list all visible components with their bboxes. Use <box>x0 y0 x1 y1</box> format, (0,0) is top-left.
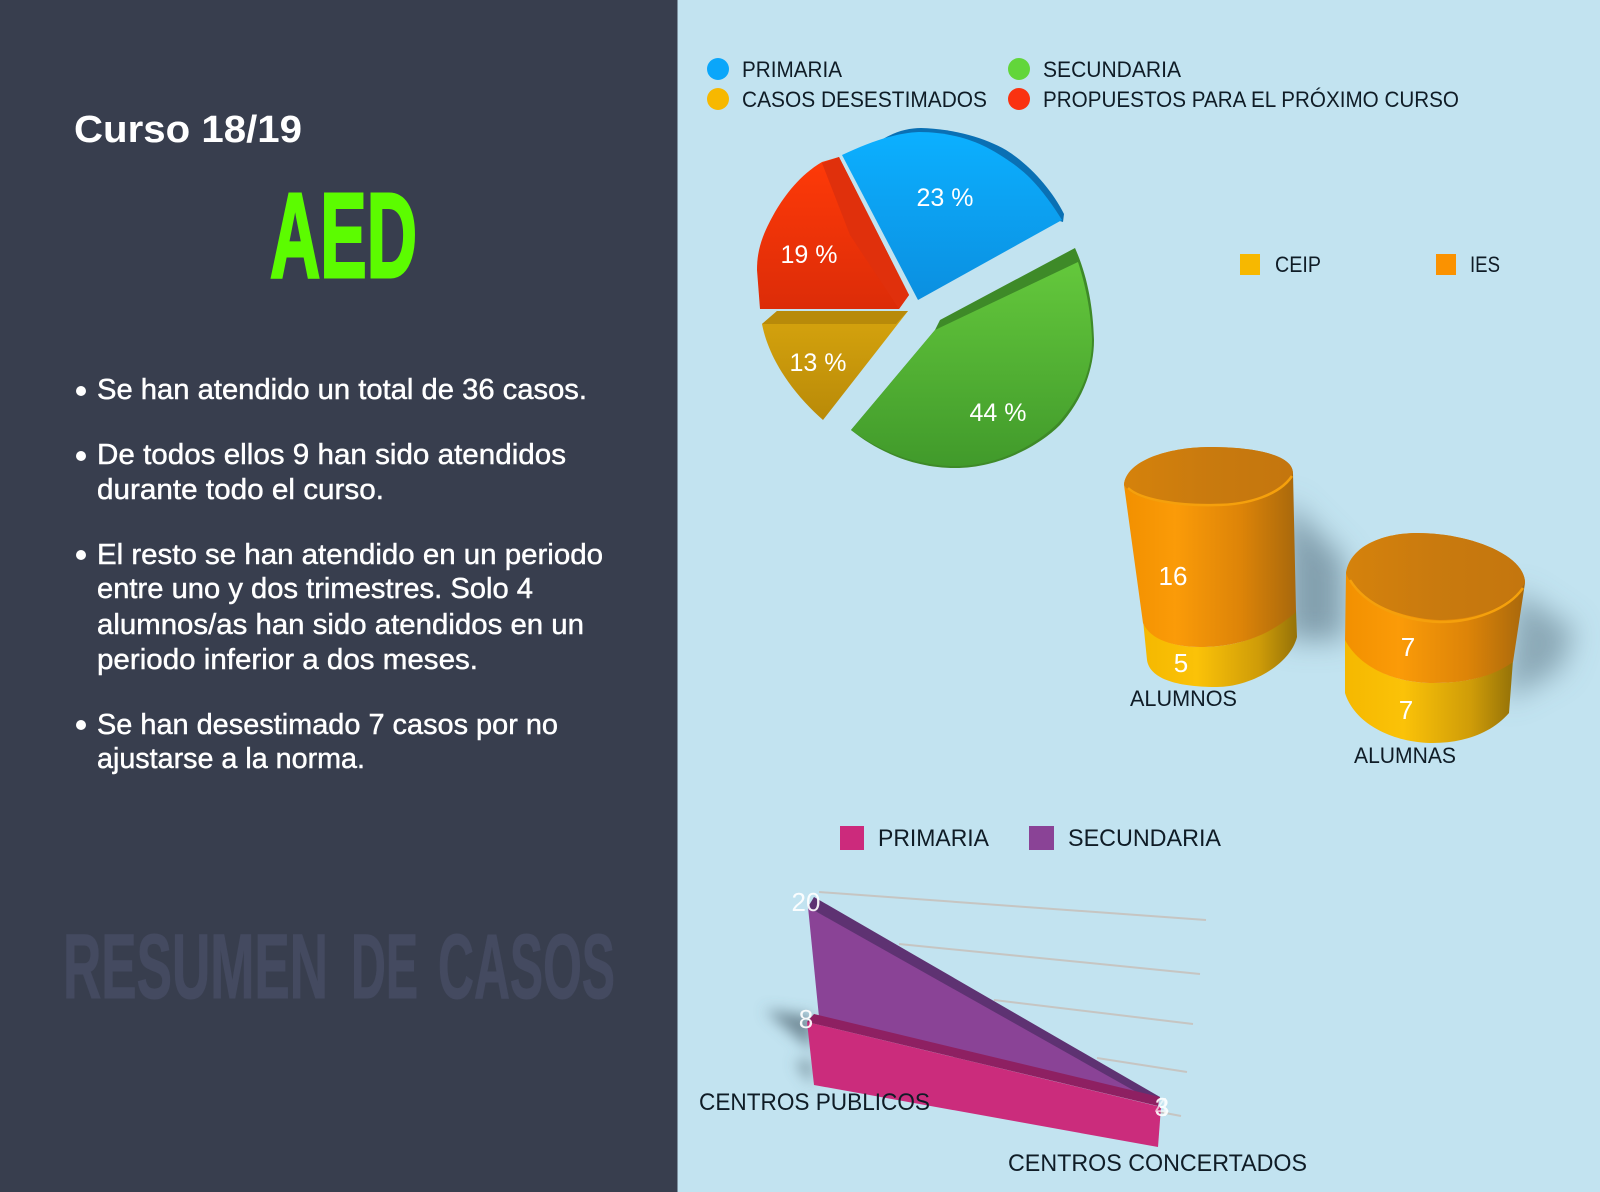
area chart legend: SECUNDARIA <box>1068 825 1221 852</box>
watermark title: DE <box>351 916 418 1018</box>
label: alumnas: ALUMNAS <box>1354 743 1456 768</box>
title: AED: AED <box>270 167 417 303</box>
cylinder chart legend <box>1240 252 1500 277</box>
axis label: centros publicos: CENTROS PUBLICOS <box>699 1089 930 1116</box>
bullet list: periodo inferior a dos meses. <box>97 644 478 676</box>
area chart legend: PRIMARIA <box>878 825 989 852</box>
bar: alumnas <box>1345 533 1525 743</box>
right panel background <box>677 0 1600 1192</box>
slice: primaria 23% <box>842 128 1064 300</box>
label: alumnos: ALUMNOS <box>1130 686 1237 711</box>
watermark title: RESUMEN <box>63 916 328 1018</box>
left panel <box>0 0 678 1192</box>
axis label: centros concertados: CENTROS CONCERTADOS <box>1008 1150 1307 1177</box>
bar: alumnas: 7 <box>1399 695 1413 725</box>
pie chart legend: SECUNDARIA <box>1043 57 1181 82</box>
cylinder chart legend: CEIP <box>1275 252 1321 277</box>
bullet list: Se han atendido un total de 36 casos. <box>97 374 587 406</box>
slice: propuestos 19% <box>757 157 909 309</box>
watermark title: CASOS <box>438 916 615 1018</box>
bar: alumnos: 16 <box>1159 561 1187 591</box>
cylinder chart legend: IES <box>1470 252 1500 277</box>
data labels: 4 <box>1155 1092 1169 1122</box>
bullet list: El resto se han atendido en un periodo <box>97 539 603 571</box>
data labels <box>792 887 1169 1122</box>
area: secundaria <box>808 897 1160 1103</box>
pie chart legend: PROPUESTOS PARA EL PRÓXIMO CURSO <box>1043 87 1459 112</box>
pie chart <box>757 128 1094 468</box>
bullet list: ajustarse a la norma. <box>97 743 365 775</box>
slice: desestimados 13% <box>762 311 908 420</box>
shadow <box>765 1010 812 1085</box>
bullet list: entre uno y dos trimestres. Solo 4 <box>97 573 533 605</box>
slice: desestimados 13%: 13 % <box>790 349 846 377</box>
pie chart legend: CASOS DESESTIMADOS <box>742 87 987 112</box>
shadows <box>1285 500 1575 700</box>
bar: alumnos: 5 <box>1174 648 1188 678</box>
slice: propuestos 19%: 19 % <box>781 241 837 269</box>
bar: alumnos <box>1124 447 1297 687</box>
data labels: 3 <box>1155 1092 1169 1122</box>
grid lines <box>819 892 1206 1116</box>
slice: primaria 23%: 23 % <box>917 184 973 212</box>
bullet list: Se han desestimado 7 casos por no <box>97 709 558 741</box>
slice: secundaria 44% <box>851 248 1094 468</box>
area chart <box>699 887 1307 1177</box>
pie chart legend <box>707 57 1459 112</box>
bullet list <box>76 374 603 775</box>
bullet list: De todos ellos 9 han sido atendidos <box>97 439 566 471</box>
heading: course: Curso 18/19 <box>74 109 302 151</box>
slice: secundaria 44%: 44 % <box>970 399 1026 427</box>
data labels: 8 <box>799 1004 813 1034</box>
bar: alumnas: 7 <box>1401 632 1415 662</box>
pie chart legend: PRIMARIA <box>742 57 842 82</box>
area: primaria <box>807 1014 1161 1147</box>
area chart legend <box>840 825 1221 852</box>
cylinder chart <box>1124 447 1575 768</box>
bullet list: durante todo el curso. <box>97 474 384 506</box>
data labels: 20 <box>792 887 820 917</box>
bullet list: alumnos/as han sido atendidos en un <box>97 609 584 641</box>
